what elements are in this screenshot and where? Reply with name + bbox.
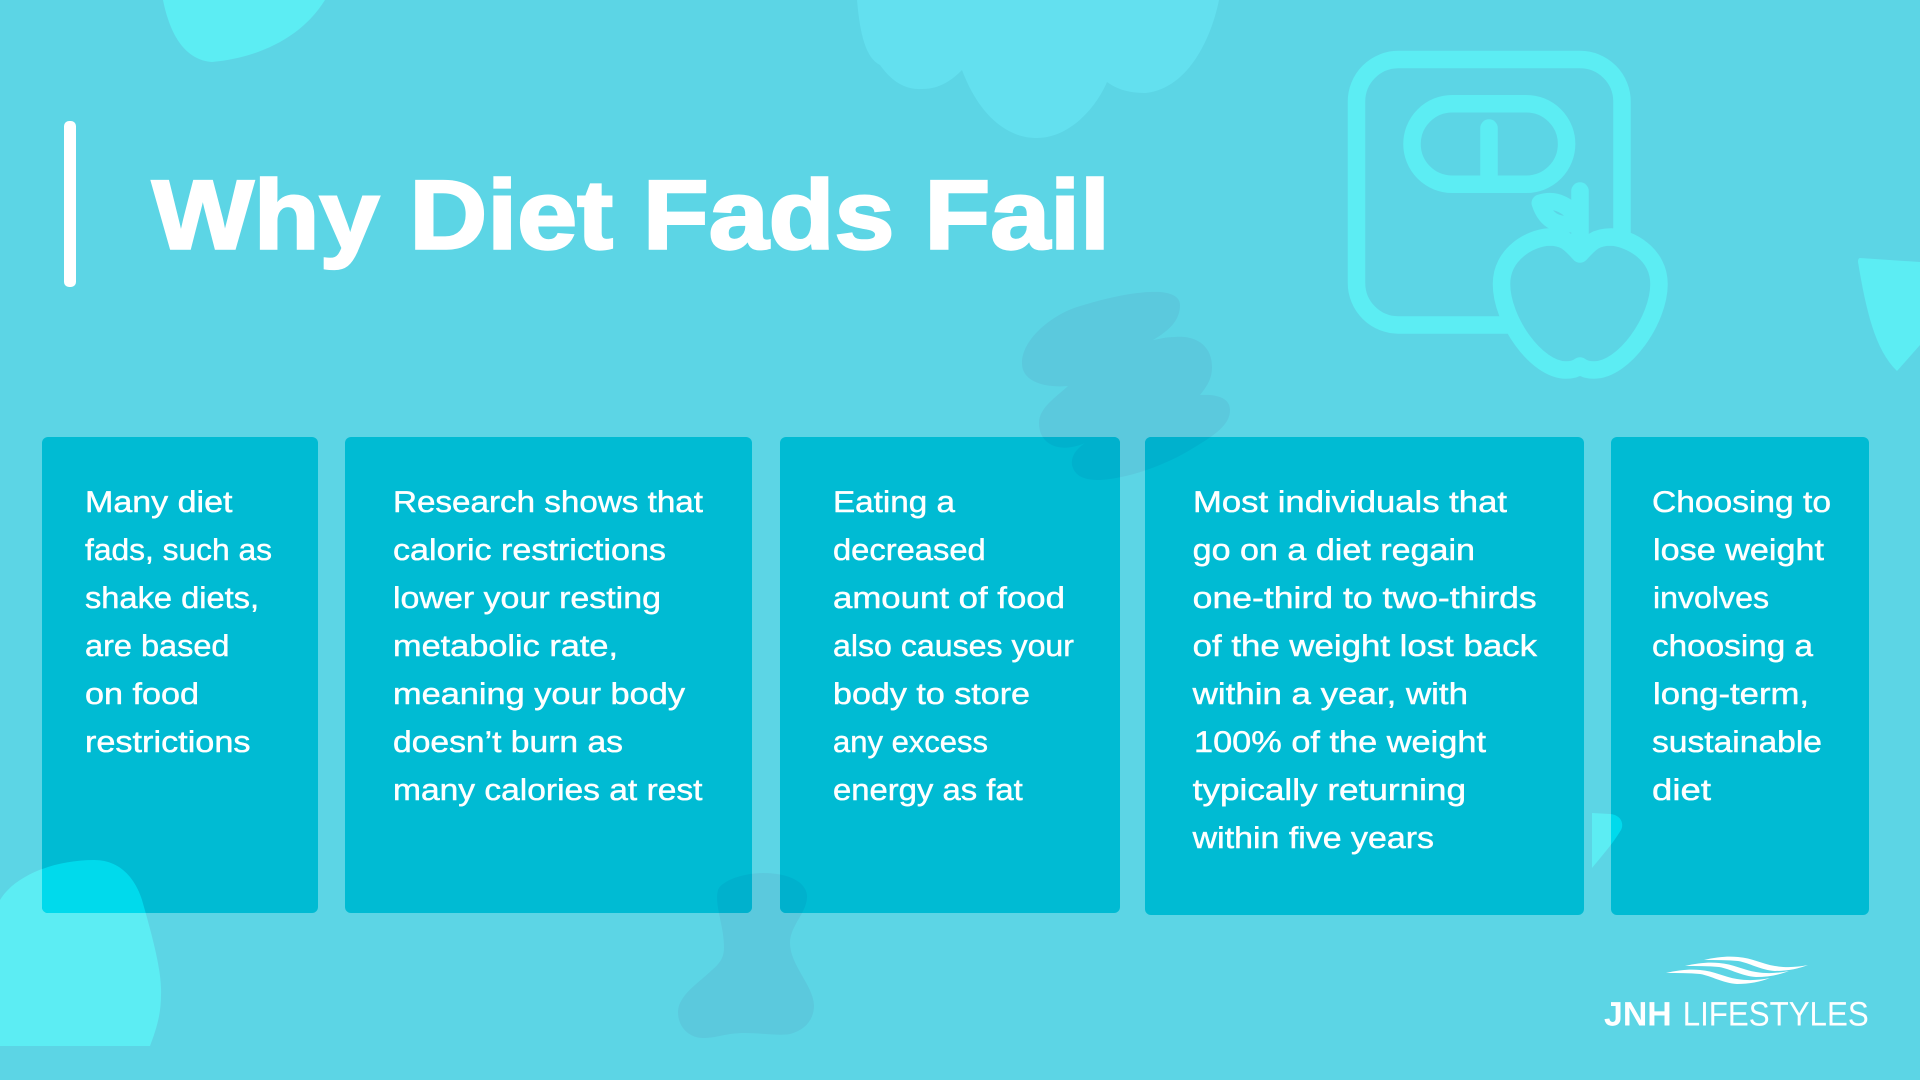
title accent bar (64, 121, 76, 287)
card 5 text: involves (1653, 582, 1769, 615)
card 5 text (1652, 486, 1831, 807)
blob: small leaf between cards (1592, 813, 1622, 868)
card 1 text: restrictions (85, 726, 250, 759)
card 4 text (1192, 486, 1538, 855)
card 3 text: decreased (833, 534, 986, 567)
card 1 text: shake diets, (85, 582, 259, 615)
card 4 text: of the weight lost back (1193, 630, 1538, 663)
card 2 text (393, 486, 704, 807)
card 5 text: diet (1652, 774, 1712, 807)
blob: dark centre (1022, 292, 1230, 480)
card 1 background (42, 437, 318, 913)
blob overlaps showing over the cards (42, 437, 1622, 913)
dark centre overlap (1043, 437, 1210, 480)
card 3 background (780, 437, 1120, 913)
card 1 text (85, 486, 272, 759)
blob: top centre (857, 0, 1219, 138)
bottom left overlap (42, 860, 146, 913)
card 1 text: fads, such as (85, 534, 272, 567)
card 5 text: lose weight (1653, 534, 1825, 567)
card 2 text: meaning your body (393, 678, 685, 711)
panel: card 3 (780, 437, 1120, 913)
blob: bottom left (0, 860, 161, 1046)
title: Why Diet Fads Fail (152, 160, 1110, 270)
blob: top left (163, 0, 325, 62)
card 3 text: energy as fat (833, 774, 1023, 807)
card 2 text: Research shows that (393, 486, 704, 519)
card 1 text: on food (85, 678, 199, 711)
dark bottom overlap (717, 874, 807, 913)
blob: dark bottom (678, 873, 814, 1038)
card 5 text: Choosing to (1652, 486, 1831, 519)
scale needle (1480, 128, 1498, 184)
card 4 text: one-third to two-thirds (1193, 582, 1537, 615)
card 2 text: many calories at rest (393, 774, 703, 807)
scale dial (1412, 104, 1567, 184)
logo: JNH Lifestyles (1604, 957, 1869, 1034)
panel: card 4 (1145, 437, 1584, 915)
card 2 text: doesn’t burn as (393, 726, 623, 759)
card 2 background (345, 437, 752, 913)
scale body (1356, 60, 1622, 325)
panel: card 1 (42, 437, 318, 913)
card 5 text: sustainable (1652, 726, 1822, 759)
card 4 text: 100% of the weight (1194, 726, 1487, 759)
card 5 text: choosing a (1652, 630, 1813, 663)
logo waves (1666, 957, 1808, 984)
panel: card 5 (1611, 437, 1869, 915)
apple leaf (1540, 202, 1578, 224)
card 3 text: amount of food (833, 582, 1065, 615)
card 2 text: lower your resting (393, 582, 661, 615)
card 1 text: are based (85, 630, 230, 663)
card 2 text: metabolic rate, (393, 630, 618, 663)
logo wordmark JNH: JNH (1604, 996, 1672, 1034)
card 5 background (1611, 437, 1869, 915)
card 3 text: Eating a (833, 486, 955, 519)
card 3 text (833, 486, 1074, 807)
apple body (1502, 237, 1659, 370)
icon: scale with apple (1356, 60, 1659, 370)
card 4 text: Most individuals that (1193, 486, 1508, 519)
card 4 text: within a year, with (1192, 678, 1468, 711)
card 4 background (1145, 437, 1584, 915)
card 4 text: within five years (1192, 822, 1434, 855)
card 3 text: any excess (833, 726, 988, 759)
card 3 text: also causes your (833, 630, 1074, 663)
small leaf overlap (1611, 814, 1622, 844)
card 4 text: typically returning (1193, 774, 1466, 807)
apple stem (1571, 191, 1589, 250)
panel: card 2 (345, 437, 752, 913)
card 5 text: long-term, (1653, 678, 1809, 711)
card 2 text: caloric restrictions (393, 534, 666, 567)
card 1 text: Many diet (85, 486, 233, 519)
blob: right edge (1858, 258, 1920, 371)
card 3 text: body to store (833, 678, 1030, 711)
logo wordmark LIFESTYLES: LIFESTYLES (1683, 996, 1869, 1034)
card 4 text: go on a diet regain (1193, 534, 1475, 567)
